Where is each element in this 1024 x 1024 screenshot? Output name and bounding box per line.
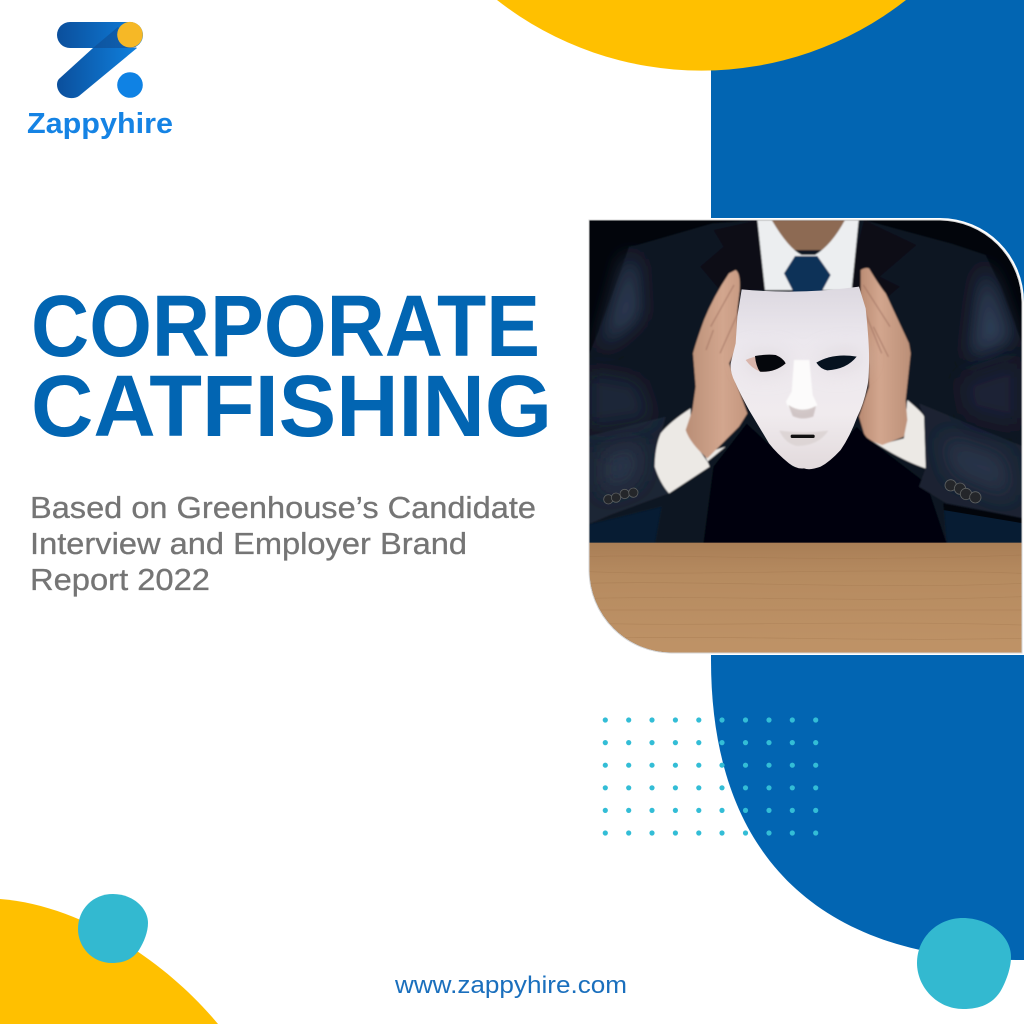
right cuff [866,400,926,468]
mask nose [786,360,817,414]
mask left eye [746,355,786,372]
mask mouth [779,431,828,446]
mask brow shading [743,348,863,373]
website url: www.zappyhire.com [394,972,627,999]
finger lines [706,285,890,357]
right hand [859,268,911,445]
logo wordmark: Zappyhire [27,108,173,140]
mask right eye [816,356,857,370]
teal blob bottom right [917,918,1011,1009]
yellow semicircle top [497,0,906,71]
subtitle: Interview and Employer Brand [30,526,467,561]
backdrop blue glow [587,503,1023,543]
right sleeve highlights [970,263,1013,360]
dotted grid [603,717,818,836]
inner torso dark [703,423,947,543]
left sleeve buttons [604,488,638,504]
logo: blue dot [117,72,143,98]
title: CORPORATE [31,278,540,375]
left lower sleeve [587,417,669,525]
tie [784,256,831,292]
logo: Zappyhire [27,22,173,140]
lapel left [700,221,764,290]
photo: businessman holding a white mask [580,210,1024,657]
yellow quarter circle bottom left [0,899,218,1024]
white mask [731,287,869,469]
title [31,278,552,455]
blue background shape [711,0,1024,960]
subtitle: Report 2022 [30,562,210,597]
left cuff [655,408,726,493]
neck [767,220,847,250]
photo white outline [587,218,1024,655]
suit body [587,220,1023,543]
photo border [589,220,1022,653]
logo mark: Z bars [57,22,143,98]
right lower sleeve [919,403,1023,518]
photo backdrop [580,210,1024,657]
subtitle [30,490,536,597]
wooden table [580,543,1024,656]
left hand [686,270,747,458]
left sleeve highlights [600,257,640,350]
lapel right [854,220,916,296]
logo: yellow circle [117,22,143,48]
right sleeve buttons [945,480,981,503]
subtitle: Based on Greenhouse’s Candidate [30,490,536,525]
title: CATFISHING [31,358,552,455]
shirt collar [757,220,859,290]
teal blob bottom left [78,894,148,963]
